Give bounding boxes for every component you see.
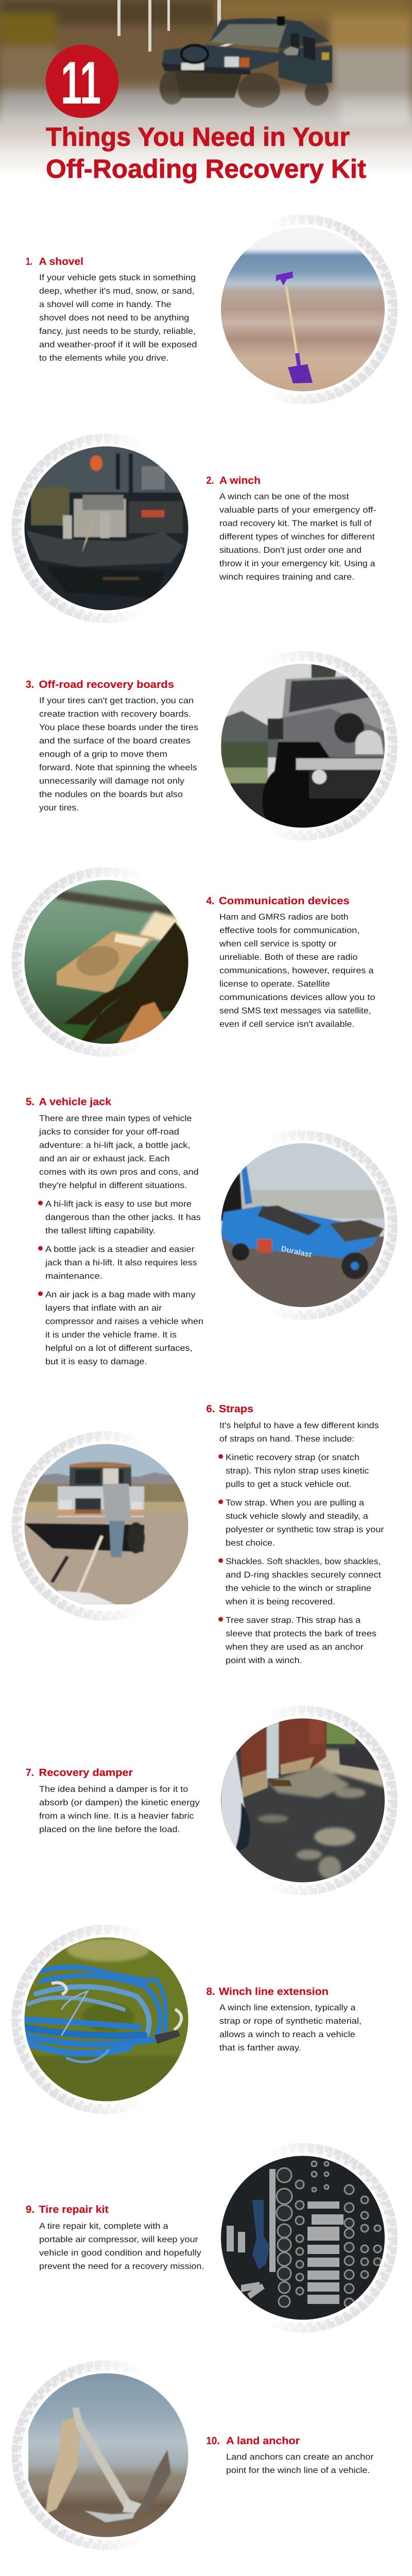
bullet: air jack: helpful on a lot of different surfaces,	[45, 1344, 193, 1353]
body text: create traction with recovery boards.	[39, 709, 191, 719]
body text: jacks to consider for your off-road	[39, 1127, 179, 1137]
body text: prevent the need for a recovery mission.	[39, 2262, 204, 2271]
item 1: a shovel	[26, 217, 394, 401]
item 5: a vehicle jack	[26, 1096, 394, 1366]
bullet: shackles: the vehicle to the winch or strapline	[226, 1584, 371, 1593]
heading: Tire repair kit	[39, 2204, 109, 2215]
body text: The idea behind a damper is for it to	[39, 1785, 188, 1794]
bullet: air jack: layers that inflate with an air	[45, 1303, 162, 1313]
photo: blue floor jack	[221, 1143, 386, 1309]
tire tread ring	[211, 217, 394, 401]
body text: If your tires can't get traction, you can	[39, 696, 194, 705]
body text	[219, 912, 375, 1029]
body text: A winch line extension, typically a	[219, 2003, 356, 2012]
bullet: tow strap: polyester or synthetic tow strap is your	[226, 1525, 384, 1534]
body text: You place these boards under the tires	[39, 723, 198, 732]
photo: socket set	[221, 2156, 386, 2320]
body text: and an air or exhaust jack. Each	[39, 1154, 170, 1163]
photo: anchor in sand	[24, 2373, 189, 2538]
bullet: bottle jack: jack than a hi-lift. It also requires less	[45, 1258, 197, 1267]
heading	[206, 1403, 253, 1415]
body text: a shovel will come in handy. The	[39, 300, 171, 309]
heading: 3.	[26, 679, 34, 690]
body text: fancy, just needs to be sturdy, reliable,	[39, 327, 196, 336]
heading: A shovel	[39, 256, 83, 267]
badge: number 11	[45, 45, 118, 118]
body text: throw it in your emergency kit. Using a	[219, 559, 375, 568]
tire tread ring	[14, 1928, 198, 2111]
bullet: tree saver strap: point with a winch.	[226, 1656, 302, 1665]
bullet: tow strap: stuck vehicle slowly and steadily, a	[226, 1512, 369, 1521]
body text: A winch can be one of the most	[219, 492, 349, 501]
bullet: hi-lift jack: dangerous than the other jacks. It has	[45, 1213, 201, 1222]
item 10: a land anchor	[14, 2364, 374, 2547]
bullet: tree saver strap	[218, 1616, 376, 1665]
bullet: shackles: and D-ring shackles securely connect	[226, 1570, 381, 1580]
bullet: hi-lift jack: A hi-lift jack is easy to use but more	[45, 1199, 192, 1209]
body text: from a winch line. It is a heavier fabric	[39, 1811, 194, 1821]
bullet: hi-lift jack: the tallest lifting capability.	[45, 1226, 156, 1235]
bullet: kinetic recovery strap: strap). This nylon strap uses kinetic	[226, 1466, 369, 1476]
body text	[219, 2003, 362, 2053]
bullet: bottle jack	[38, 1245, 197, 1281]
tire tread ring	[211, 654, 394, 838]
body text: allows a winch to reach a vehicle	[219, 2030, 355, 2039]
body text	[226, 2452, 374, 2475]
item 6: straps	[14, 1403, 384, 1665]
bullet: air jack: An air jack is a bag made with many	[45, 1290, 196, 1299]
body text	[39, 1785, 200, 1834]
heading: 1.	[26, 256, 32, 267]
item 4: communication devices	[14, 870, 375, 1054]
bullet: bottle jack: maintenance.	[45, 1272, 102, 1281]
title: Off-Roading Recovery Kit	[46, 154, 366, 183]
tire tread ring	[211, 1708, 394, 1892]
item 2: a winch	[14, 437, 376, 620]
body text: situations. Don't just order one and	[219, 546, 362, 555]
bullet: tree saver strap: Tree saver strap. This strap has a	[226, 1616, 361, 1625]
photo: shaded driveway	[221, 1718, 386, 1883]
photo: truck with tow strap	[24, 1444, 189, 1609]
bullet: kinetic recovery strap: pulls to get a stuck vehicle out.	[226, 1480, 352, 1489]
bullet: tree saver strap: sleeve that protects the bark of trees	[226, 1629, 376, 1638]
body text: road recovery kit. The market is full of	[219, 519, 372, 528]
bullet: shackles: Shackles. Soft shackles, bow shackles,	[226, 1557, 381, 1566]
body text: your tires.	[39, 803, 79, 812]
photo: winch on bumper	[24, 446, 189, 611]
body text: that is farther away.	[219, 2043, 301, 2053]
tire tread ring	[14, 2364, 198, 2547]
heading: 5.	[26, 1096, 35, 1108]
body text: A tire repair kit, complete with a	[39, 2222, 168, 2231]
body text: when cell service is spotty or	[219, 939, 337, 948]
item 7: recovery damper	[26, 1708, 394, 1892]
body text: enough of a grip to move them	[39, 750, 167, 759]
heading: 2.	[206, 475, 214, 486]
title: Things You Need in Your	[46, 122, 350, 151]
body text: Land anchors can create an anchor	[226, 2452, 374, 2462]
body text: shovel does not need to be anything	[39, 313, 189, 323]
bullet: kinetic recovery strap	[218, 1453, 369, 1489]
bullet: tow strap: Tow strap. When you are pulling a	[226, 1498, 365, 1507]
body text: It's helpful to have a few different kinds	[219, 1421, 379, 1430]
body text	[39, 2222, 204, 2271]
body text: forward. Note that spinning the wheels	[39, 763, 197, 772]
heading: A vehicle jack	[39, 1096, 112, 1108]
body text: If your vehicle gets stuck in something	[39, 273, 196, 282]
body text: effective tools for communication,	[219, 926, 359, 935]
tire tread ring	[14, 870, 198, 1054]
bullet: air jack	[38, 1290, 203, 1366]
bullet: hi-lift jack	[38, 1199, 201, 1235]
heading: Winch line extension	[219, 1986, 329, 1997]
hero photo: off-road vehicle in mud	[0, 0, 412, 178]
body text: to the elements while you drive.	[39, 353, 169, 363]
body text: point for the winch line of a vehicle.	[226, 2466, 370, 2475]
bullet: air jack: compressor and raises a vehicle when	[45, 1317, 203, 1326]
heading: Straps	[219, 1403, 253, 1415]
tire tread ring	[211, 1133, 394, 1317]
body text	[39, 1114, 199, 1190]
body text: license to operate. Satellite	[219, 979, 330, 989]
body text: absorb (or dampen) the kinetic energy	[39, 1798, 200, 1807]
body text: comes with its own pros and cons, and	[39, 1167, 199, 1177]
heading: Recovery damper	[39, 1767, 133, 1778]
body text: vehicle in good condition and hopefully	[39, 2248, 202, 2258]
tire tread ring	[14, 437, 198, 620]
body text: unnecessarily will damage not only	[39, 776, 185, 786]
item 8: winch line extension	[14, 1928, 362, 2111]
heading: A winch	[219, 475, 261, 486]
bullet: tow strap	[218, 1498, 384, 1548]
title	[46, 122, 366, 183]
tire tread ring	[211, 2146, 394, 2330]
bullet: air jack: it is under the vehicle frame. It is	[45, 1330, 177, 1340]
heading: 4.	[206, 895, 214, 907]
item 3: off-road recovery boards	[26, 654, 394, 838]
body text	[39, 273, 197, 363]
body text: placed on the line before the load.	[39, 1825, 180, 1834]
body text	[219, 492, 376, 582]
body text: different types of winches for different	[219, 532, 375, 541]
body text: winch requires training and care.	[219, 572, 354, 582]
body text: strap or rope of synthetic material,	[219, 2016, 362, 2026]
photo: shovel in sand	[221, 228, 385, 392]
body text: they're helpful in different situations.	[39, 1181, 187, 1190]
body text: adventure: a hi-lift jack, a bottle jack,	[39, 1141, 190, 1150]
body text: communications, however, requires a	[219, 966, 374, 975]
body text: unreliable. Both of these are radio	[219, 953, 357, 962]
body text: valuable parts of your emergency off-	[219, 505, 376, 515]
body text: deep, whether it's mud, snow, or sand,	[39, 286, 195, 296]
body text: of straps on hand. These include:	[219, 1434, 354, 1444]
bullet: tow strap: best choice.	[226, 1538, 275, 1548]
bullet: shackles	[218, 1557, 381, 1606]
body text	[219, 1421, 379, 1444]
body text: the nodules on the boards but also	[39, 790, 183, 799]
heading: Off-road recovery boards	[39, 679, 174, 690]
bullet: air jack: but it is easy to damage.	[45, 1357, 147, 1366]
body text: communications devices allow you to	[219, 993, 375, 1002]
body text: There are three main types of vehicle	[39, 1114, 192, 1123]
badge: number 11: 11	[61, 49, 101, 116]
bullet: tree saver strap: when they are used as an anchor	[225, 1642, 364, 1652]
photo: muddy jeep	[221, 664, 386, 835]
tire tread ring	[14, 1434, 198, 1618]
item 9: tire repair kit	[26, 2146, 394, 2330]
heading: 10.	[206, 2435, 219, 2447]
heading: 8.	[206, 1986, 215, 1997]
bullet: bottle jack: A bottle jack is a steadier and easier	[45, 1245, 195, 1254]
body text: portable air compressor, will keep your	[39, 2235, 198, 2244]
photo: handheld radio	[24, 879, 191, 1046]
bullet: shackles: when it is being recovered.	[225, 1597, 335, 1606]
bullet: kinetic recovery strap: Kinetic recovery strap (or snatch	[226, 1453, 359, 1462]
heading: 9.	[26, 2204, 35, 2215]
heading: A land anchor	[226, 2435, 300, 2447]
heading: Communication devices	[219, 895, 350, 907]
body text	[39, 696, 198, 812]
body text: send SMS text messages via satellite,	[219, 1006, 371, 1015]
photo: blue floor jack: Duralast	[280, 1244, 312, 1259]
body text: and the surface of the board creates	[39, 736, 191, 745]
body text: even if cell service isn't available.	[219, 1020, 354, 1029]
heading: 7.	[26, 1767, 34, 1778]
photo: blue rope on grass	[24, 1937, 189, 2102]
heading: 6.	[206, 1403, 215, 1415]
body text: and weather-proof if it will be exposed	[39, 340, 197, 349]
body text: Ham and GMRS radios are both	[219, 912, 348, 922]
